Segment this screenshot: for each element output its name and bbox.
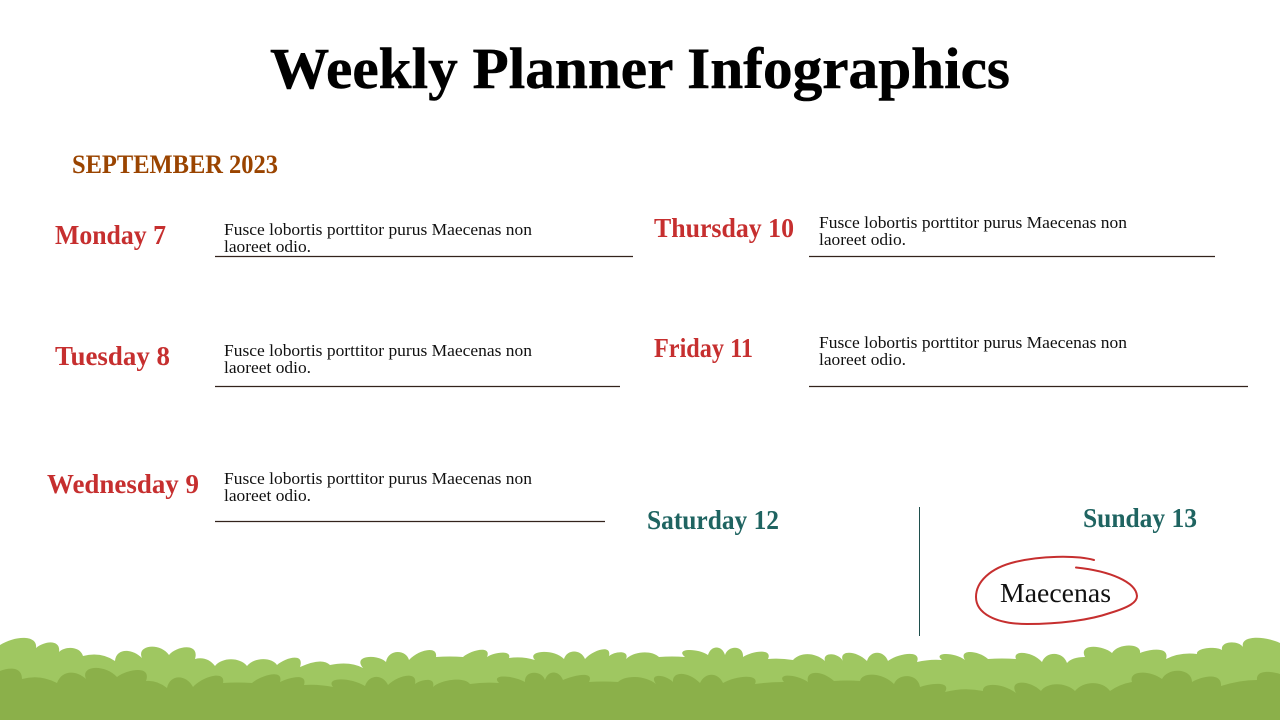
text block: Monday notes: [224, 220, 533, 256]
callout text: Maecenas: [1000, 578, 1111, 608]
title: Weekly Planner Infographics: [270, 36, 1010, 101]
text block: Wednesday notes: laoreet odio.: [224, 486, 311, 505]
day label: Sunday 13: Sunday 13: [1083, 503, 1197, 533]
day label: Saturday 12: Saturday 12: [647, 505, 779, 535]
panel: Monday 7: [55, 220, 633, 256]
text block: Friday notes: [819, 333, 1128, 369]
text block: Wednesday notes: [224, 469, 533, 505]
back grass layer: [0, 638, 1280, 720]
text block: Monday notes: laoreet odio.: [224, 237, 311, 256]
text block: Tuesday notes: [224, 341, 533, 377]
day label: Tuesday: Tuesday 8: [55, 341, 170, 371]
month heading: SEPTEMBER 2023: [72, 150, 278, 179]
panel: Thursday 10: [654, 213, 1215, 256]
text block: Thursday notes: Fusce lobortis porttitor purus Maecenas non: [819, 213, 1128, 232]
text block: Friday notes: Fusce lobortis porttitor purus Maecenas non: [819, 333, 1128, 352]
text block: Thursday notes: [819, 213, 1128, 249]
day label: Friday: Friday 11: [654, 333, 753, 363]
front grass layer: [0, 668, 1280, 720]
panel: Friday 11: [654, 333, 1248, 386]
grass border: [0, 638, 1280, 720]
text block: Monday notes: Fusce lobortis porttitor purus Maecenas non: [224, 220, 533, 239]
callout: circled Maecenas: [976, 557, 1137, 624]
text block: Tuesday notes: Fusce lobortis porttitor purus Maecenas non: [224, 341, 533, 360]
day label: Monday: Monday 7: [55, 220, 166, 250]
panel: Wednesday 9: [47, 469, 605, 522]
day label: Thursday: Thursday 10: [654, 213, 794, 243]
text block: Friday notes: laoreet odio.: [819, 350, 906, 369]
day label: Wednesday: Wednesday 9: [47, 469, 199, 499]
hand-drawn red oval: [976, 557, 1137, 624]
text block: Tuesday notes: laoreet odio.: [224, 358, 311, 377]
text block: Thursday notes: laoreet odio.: [819, 230, 906, 249]
text block: Wednesday notes: Fusce lobortis porttitor purus Maecenas non: [224, 469, 533, 488]
panel: Tuesday 8: [55, 341, 620, 386]
